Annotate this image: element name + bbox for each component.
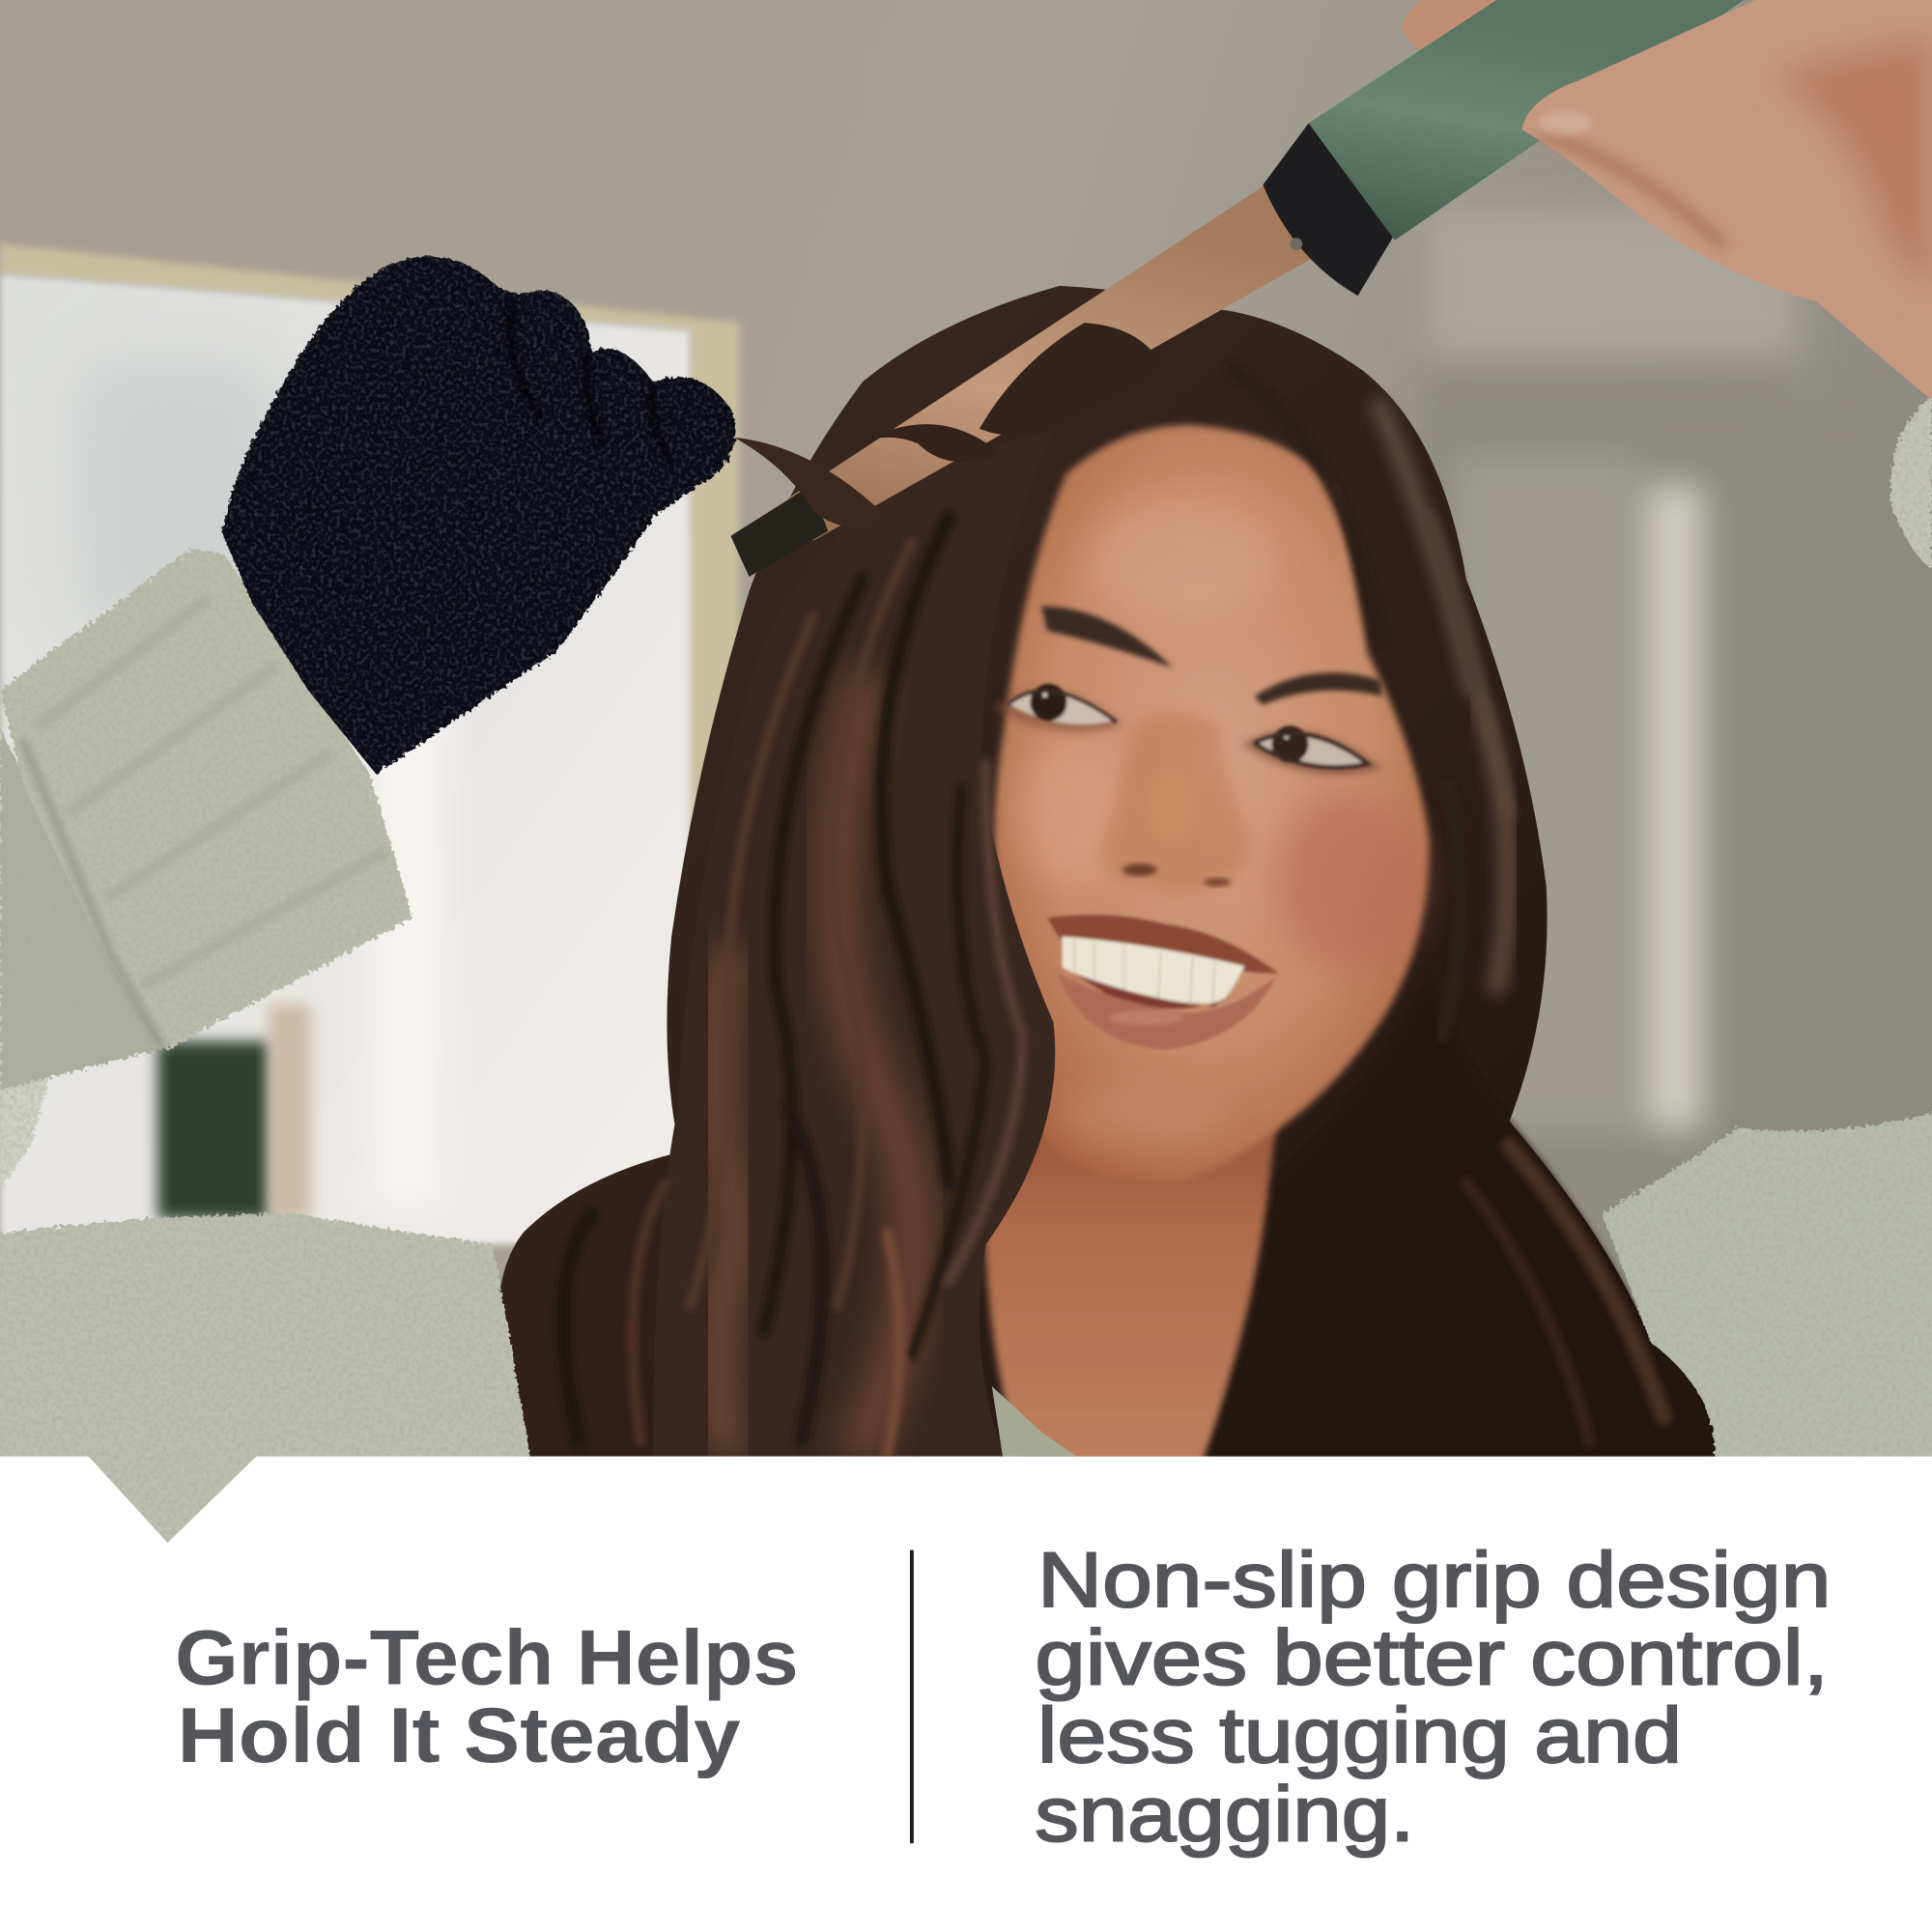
description text <box>1035 1537 1831 1859</box>
barrel rivet <box>1290 238 1302 250</box>
heading: Grip-Tech Helps Hold It Steady: Grip-Tech Helps <box>175 1615 799 1702</box>
back hair mass <box>497 286 1716 1457</box>
neck <box>981 1126 1281 1457</box>
face <box>993 425 1430 1181</box>
left eye <box>993 684 1123 732</box>
black collar <box>1263 124 1399 296</box>
dark hair behind the neck on the right <box>1205 985 1716 1466</box>
chin shading <box>1061 1090 1207 1148</box>
right eyebrow <box>1254 672 1382 705</box>
right eye <box>1242 725 1382 775</box>
sweater collar <box>992 1386 1091 1466</box>
heading: Grip-Tech Helps Hold It Steady: Hold It Steady <box>178 1692 741 1779</box>
mouth: lips and teeth <box>1047 915 1279 1050</box>
glove finger creases <box>510 301 671 462</box>
sage green handle <box>1309 0 1762 241</box>
forehead highlight <box>1092 500 1269 612</box>
cuff ribs and fold shadow <box>22 598 388 1047</box>
left sleeve with ribbed cuff <box>0 549 412 1189</box>
fingers behind the handle <box>1403 0 1496 50</box>
lower sweater left <box>0 1213 532 1555</box>
black cool tip <box>730 486 828 577</box>
divider <box>910 1550 914 1843</box>
left eyebrow <box>1041 607 1173 668</box>
description text: gives better control, <box>1035 1615 1829 1702</box>
heading: Grip-Tech Helps Hold It Steady <box>175 1615 799 1779</box>
hair strands wrapped around barrel <box>734 323 1161 526</box>
bright window on the left <box>0 244 739 1244</box>
lower sweater right <box>1602 1109 1932 1466</box>
blurred doorway on the right <box>1420 206 1806 1148</box>
description text: snagging. <box>1035 1772 1414 1859</box>
black grip-tech glove <box>222 256 735 774</box>
hair lock across the face <box>653 431 1055 1457</box>
hand gripping the handle <box>1521 0 1932 401</box>
cheek glow <box>1012 745 1111 883</box>
cheek blush <box>1278 792 1421 970</box>
right sleeve edge <box>1890 397 1932 569</box>
description text: less tugging and <box>1037 1692 1682 1779</box>
curling iron <box>730 0 1762 577</box>
copper barrel <box>788 183 1316 541</box>
hair strands and warm highlights <box>563 370 1663 1454</box>
description text: Non-slip grip design <box>1037 1537 1831 1624</box>
nose shading <box>1100 712 1249 893</box>
